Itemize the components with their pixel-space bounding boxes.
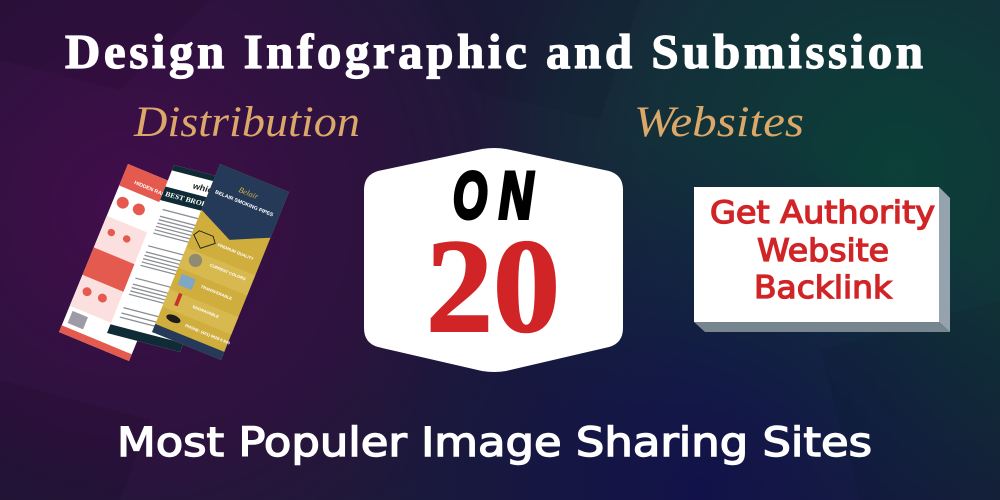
footer heading: Most Populer Image Sharing Sites [117,420,872,466]
thumbnail: gold pipes infographic: Belair [237,185,260,201]
thumbnail: red infographic [59,164,198,361]
thumbnail: red infographic: HIDDEN RANKINGS [133,180,182,205]
number: 20: 20 [426,212,560,360]
callout text: Website [757,233,889,269]
box side [939,187,950,332]
word: ON: O [453,158,487,232]
subtitle: Websites: Websites [634,99,804,146]
thumbnail: gold pipes infographic: CURRENT COLORS [209,262,247,282]
callout text [710,195,935,306]
thumbnail: gold pipes infographic: BELAIR SMOKING PIPES [214,190,275,219]
thumbnail: gold pipes infographic: PREMIUM QUALITY [217,242,255,261]
title: Design Infographic and Submission [65,24,923,79]
box bottom [694,322,950,332]
word: ON: N [499,158,534,232]
thumbnail: gold pipes infographic: TRANSFERABLE [200,284,233,301]
thumbnail: gold pipes infographic [152,164,292,361]
badge shape [364,148,623,372]
callout box [694,187,950,332]
thumbnail: gold pipes infographic: ENGRAVABLE [192,304,220,319]
word: ON [453,158,534,232]
callout text: Backlink [754,270,892,306]
thumbnail: gold pipes infographic: PHONE: (401) 9828 8 840 [184,323,232,346]
thumbnail: dark brokers infographic: BEST BROKERS [164,190,223,212]
callout text: Get Authority [710,195,935,231]
box face [694,187,939,322]
subtitle: Distribution: Distribution [133,99,360,146]
infographic thumbnails [59,164,292,361]
center badge [364,148,623,372]
thumbnail: dark brokers infographic: which [190,181,220,197]
thumbnail: dark brokers infographic [107,165,247,352]
